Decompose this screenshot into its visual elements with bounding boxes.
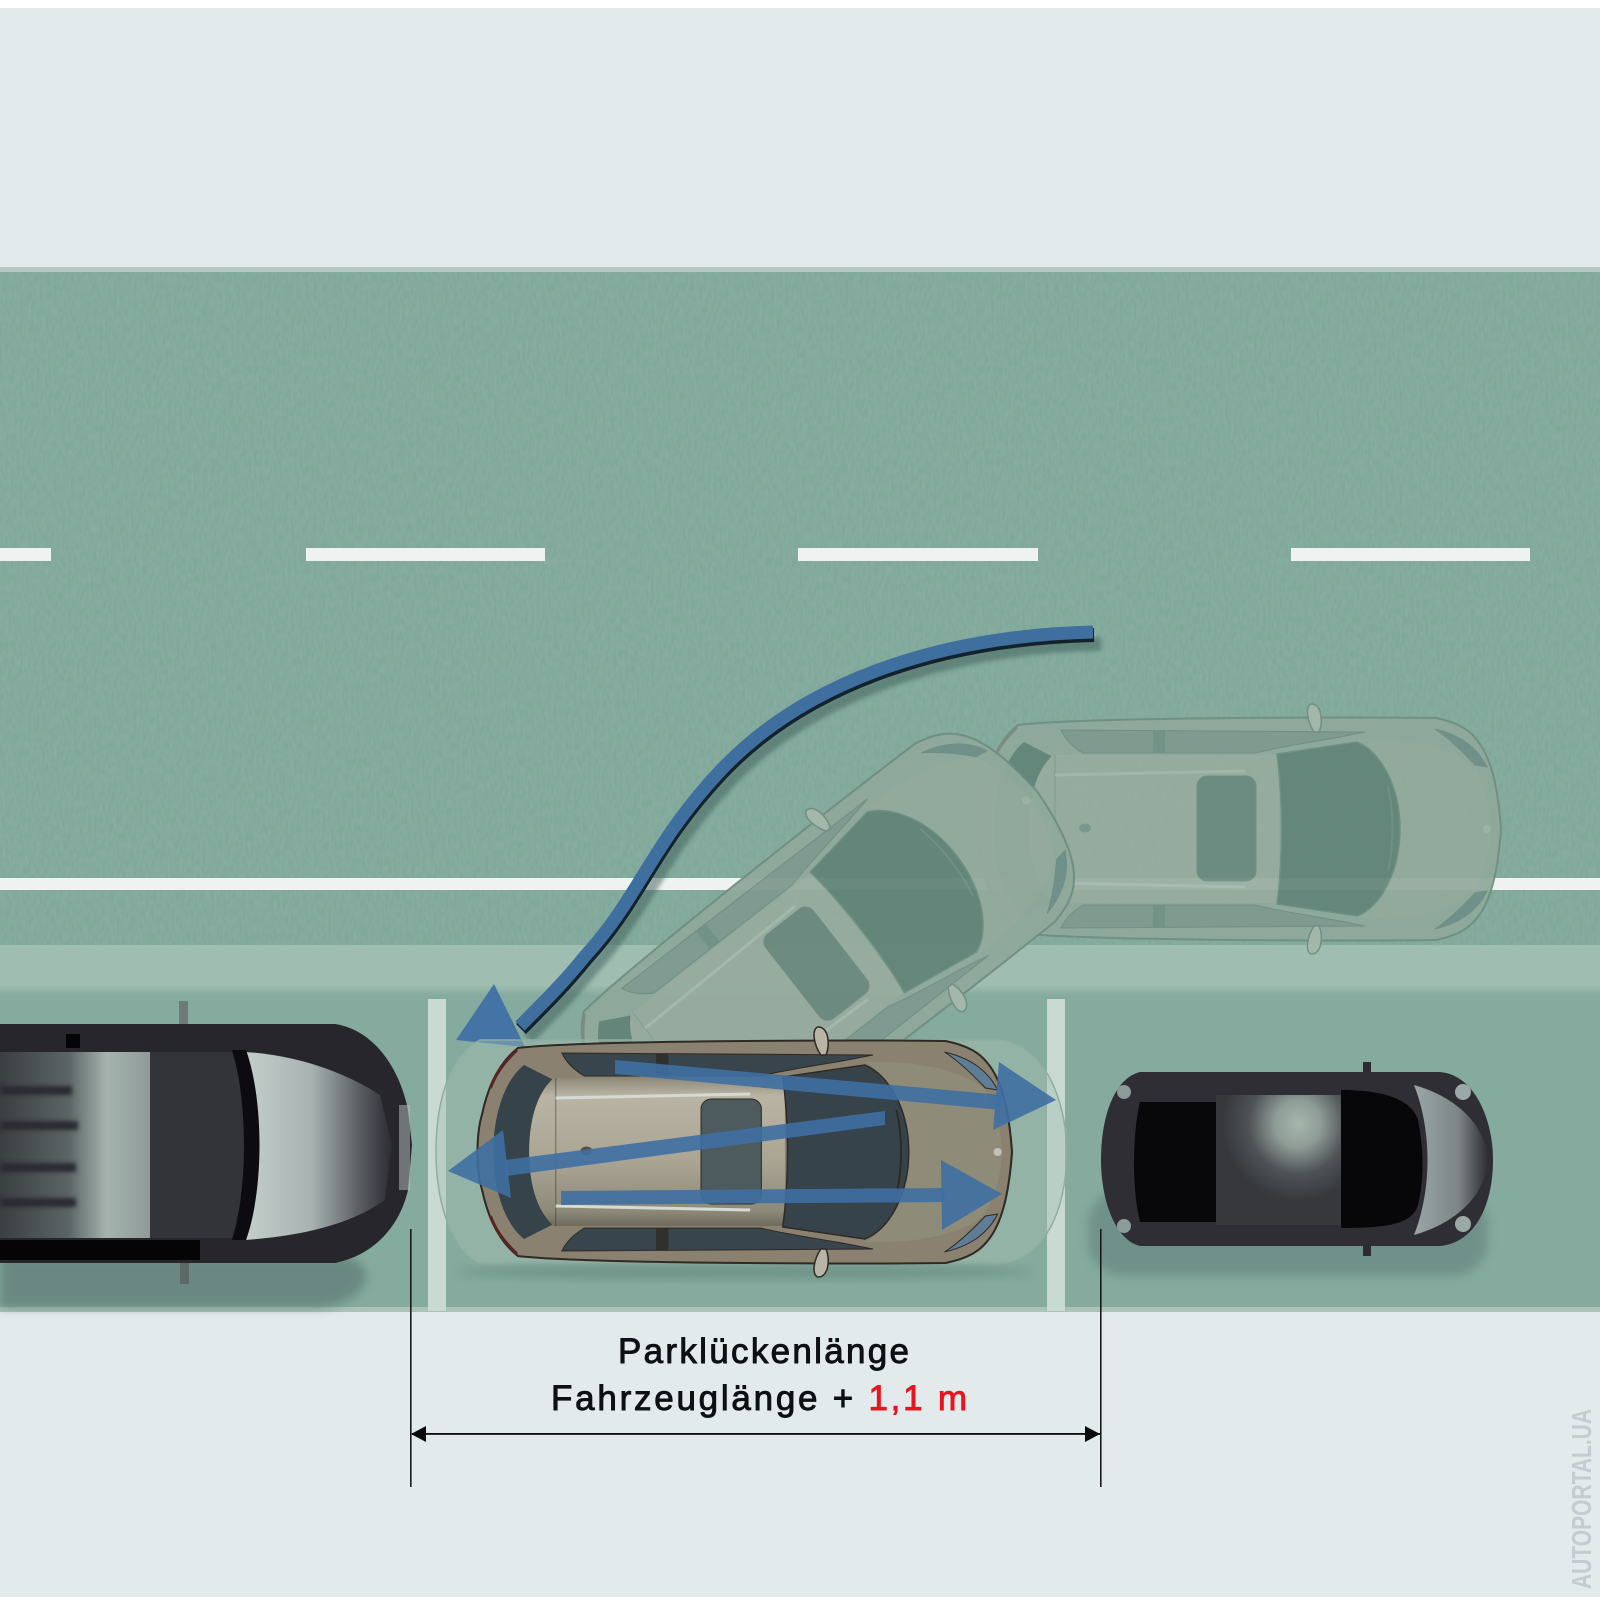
- blue steering path: [520, 632, 1101, 1038]
- car ghost: final position outline: [436, 1040, 1067, 1280]
- arrow: backward: [448, 1111, 885, 1198]
- blue path arrowhead: [456, 984, 525, 1047]
- panel: parking lane: [0, 945, 1600, 1310]
- car ghost: turning position: [539, 691, 1116, 1220]
- parking bay line left: [428, 999, 446, 1311]
- panel: upper sidewalk: [0, 8, 1600, 270]
- car ghost: starting position: [978, 704, 1501, 954]
- arrow: forward: [615, 1060, 1056, 1130]
- lower sidewalk: [0, 1307, 1600, 1597]
- label line 2: Fahrzeuglänge + 1,1 m: [551, 1379, 967, 1418]
- parking bay line right: [1047, 999, 1065, 1311]
- arrow: forward again: [561, 1160, 1002, 1230]
- dimension: extension line right: [1100, 1229, 1102, 1487]
- label: parking gap length: [551, 1332, 967, 1418]
- dimension: arrow with both heads: [411, 1426, 1100, 1442]
- car: parked car left (dark): [0, 1001, 412, 1308]
- maneuver arrows on main car: [448, 1060, 1056, 1230]
- car: parked car right (dark): [1088, 1062, 1493, 1276]
- watermark: AUTOPORTAL.UA: [1566, 1409, 1597, 1589]
- car: main car, parked: [478, 1027, 1012, 1277]
- panel: road surface: [0, 267, 1600, 1312]
- lane markings: dashed centre line: [0, 548, 1530, 561]
- dimension: extension line left: [410, 1229, 412, 1487]
- lane marking: solid line: [0, 878, 1600, 890]
- label line 1: Parklückenlänge: [618, 1332, 909, 1371]
